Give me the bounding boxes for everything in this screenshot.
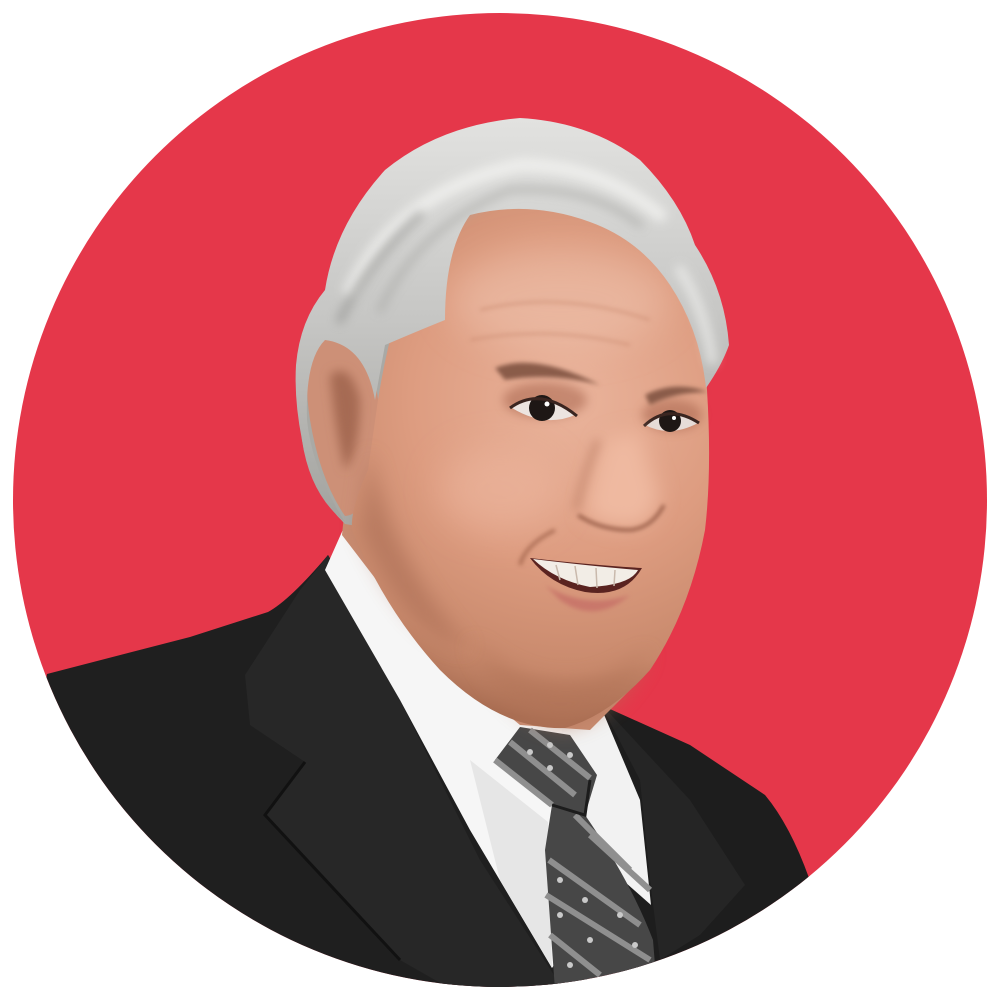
neck bbox=[342, 522, 630, 730]
cheek shading bbox=[352, 474, 456, 641]
jacket lapel left bbox=[324, 555, 558, 987]
eyebrow right bbox=[645, 387, 708, 405]
forehead highlight bbox=[450, 250, 670, 350]
smile line bbox=[520, 530, 555, 565]
striped necktie bbox=[495, 727, 655, 990]
hair underlay bbox=[302, 343, 390, 526]
eye left bbox=[510, 395, 577, 421]
eye right bbox=[644, 410, 699, 432]
eyebrow left bbox=[495, 363, 600, 385]
person bbox=[0, 118, 809, 1000]
jacket lapel right bbox=[660, 960, 661, 961]
ear bbox=[307, 336, 380, 516]
eye socket shadows bbox=[503, 382, 702, 431]
forehead wrinkles bbox=[470, 302, 650, 345]
hair strands bbox=[340, 165, 712, 360]
silver hair bbox=[296, 118, 729, 522]
chin shadow bbox=[511, 682, 639, 739]
tie dots bbox=[527, 742, 638, 968]
nose bbox=[576, 430, 664, 530]
white shirt bbox=[325, 525, 651, 968]
left cheek highlight bbox=[445, 459, 544, 530]
suit jacket bbox=[0, 555, 809, 1000]
mouth bbox=[530, 558, 642, 611]
face bbox=[352, 207, 709, 728]
